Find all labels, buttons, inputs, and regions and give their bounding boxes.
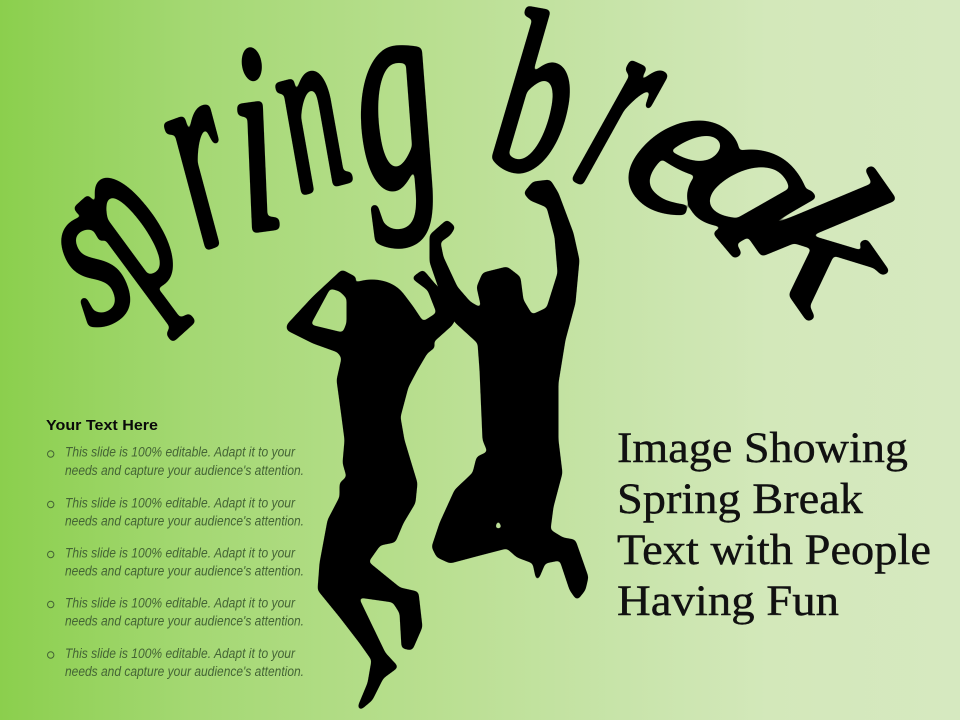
bullet 2 [48,496,304,528]
curved script title: spring break [0,0,957,373]
letter a: a [641,66,886,295]
letter p: p [0,94,227,341]
subheading: Your Text Here [46,417,158,434]
heading line 1: Image Showing [617,425,908,472]
heading line 4: Having Fun [617,578,839,625]
main heading [617,425,931,625]
bullet 3 [48,546,304,578]
bullet 3: needs and capture your audience's attention. [65,564,304,578]
bullet 1: needs and capture your audience's attention. [65,463,304,478]
letter s: s [7,127,163,373]
left text block [46,417,304,679]
bullet 1: This slide is 100% editable. Adapt it to your [65,444,295,460]
bullet 4: needs and capture your audience's attention. [65,614,304,628]
bullet 1 [48,444,304,478]
bullet 5: This slide is 100% editable. Adapt it to your [65,646,295,661]
letter k: k [711,130,957,349]
bullet 2: needs and capture your audience's attention. [65,514,304,528]
silhouette: jumping man [430,180,588,600]
letter r: r [116,0,274,306]
letter e: e [584,25,808,268]
bullet 5: needs and capture your audience's attention. [65,664,304,679]
bullet 4: This slide is 100% editable. Adapt it to your [65,596,295,610]
bullet 4 [48,596,304,628]
bullet 2: This slide is 100% editable. Adapt it to your [65,496,295,510]
bullet 3: This slide is 100% editable. Adapt it to your [65,546,295,560]
bullet 5 [48,646,304,679]
heading line 3: Text with People [617,527,931,574]
heading line 2: Spring Break [617,476,864,523]
silhouette: jumping woman [287,270,460,710]
